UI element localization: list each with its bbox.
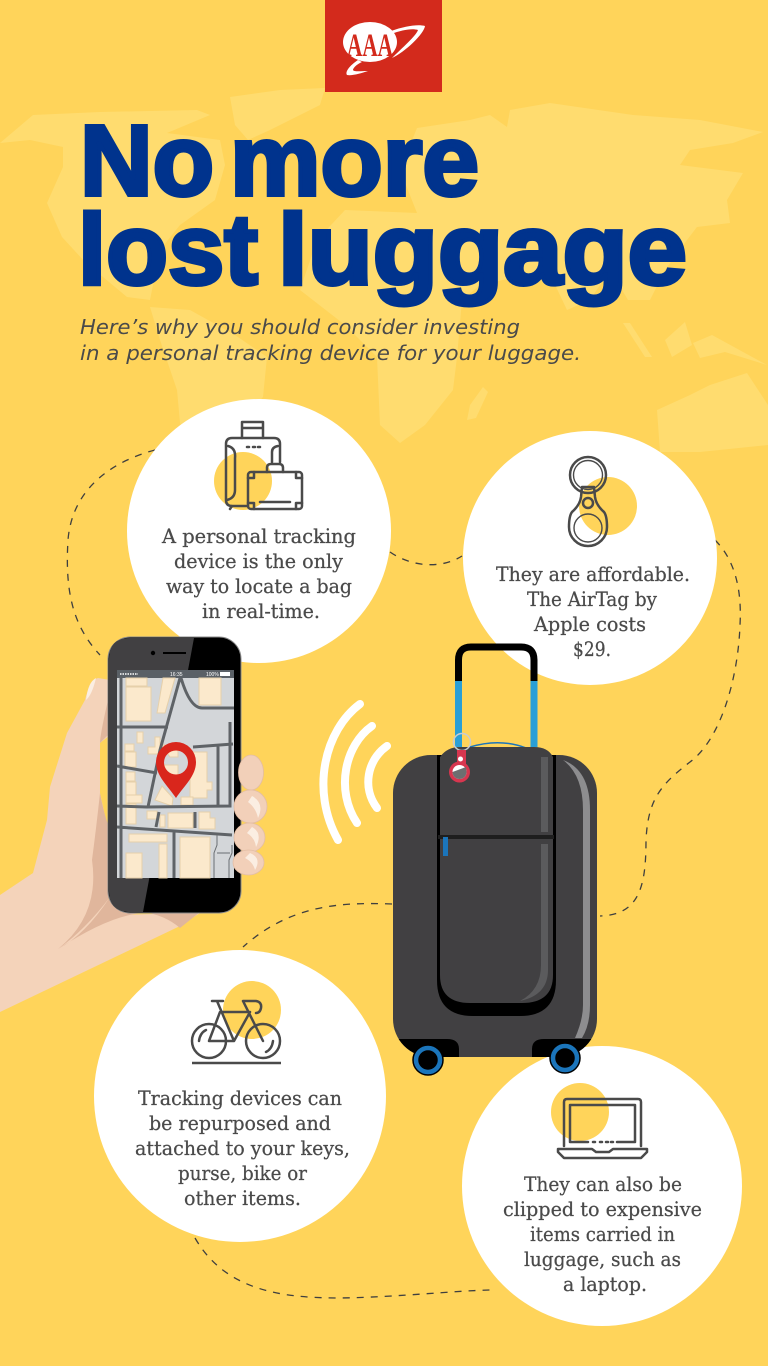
- text: repurposed: [135, 1087, 350, 1210]
- text: repurposed: be repurposed and: [149, 1112, 331, 1135]
- text: expensive items: They can also be: [524, 1173, 682, 1196]
- icon: suitcases: [214, 422, 302, 510]
- panel: real-time location: [127, 399, 391, 663]
- hand holding phone: [0, 678, 200, 1012]
- AAA logo block: AAA: [347, 28, 393, 64]
- title: more: [230, 105, 479, 217]
- dashed route lines: [67, 450, 740, 1298]
- text: repurposed: other items.: [184, 1187, 301, 1210]
- text: repurposed: attached to your keys,: [135, 1137, 350, 1160]
- text: real-time location: in real-time.: [202, 600, 320, 623]
- text: real-time location: [161, 525, 356, 623]
- icon: bicycle: [192, 981, 281, 1063]
- subtitle: [80, 315, 581, 365]
- text: expensive items: luggage, such as: [524, 1248, 681, 1271]
- luggage handle: [458, 647, 534, 747]
- text: real-time location: device is the only: [174, 550, 343, 573]
- title: No: [80, 105, 214, 217]
- map buildings: [125, 678, 221, 878]
- signal waves: [323, 704, 387, 840]
- AAA logo block: [325, 0, 442, 92]
- text: affordable: Apple costs: [533, 613, 646, 636]
- text: affordable: The AirTag by: [527, 588, 657, 611]
- icon: AirTag holder: [569, 457, 637, 546]
- wheel housings: [398, 1039, 592, 1057]
- panel: repurposed: [94, 950, 386, 1242]
- subtitle: in a personal tracking device for your luggage.: [80, 341, 581, 365]
- icon: laptop: [551, 1083, 647, 1158]
- map roads: [117, 678, 234, 878]
- luggage: [390, 647, 600, 1075]
- text: affordable: $29.: [573, 638, 611, 661]
- text: expensive items: clipped to expensive: [503, 1198, 702, 1221]
- text: affordable: [496, 563, 690, 661]
- phone with map: [108, 637, 241, 913]
- world map background: [0, 88, 768, 452]
- status bar text: [120, 672, 230, 678]
- subtitle: Here’s why you should consider investing: [80, 315, 520, 339]
- text: expensive items: items carried in: [530, 1223, 675, 1246]
- text: repurposed: purse, bike or: [178, 1162, 308, 1185]
- status bar text: 100%: [206, 672, 219, 678]
- text: real-time location: way to locate a bag: [166, 575, 352, 598]
- text: expensive items: [503, 1173, 702, 1296]
- text: real-time location: A personal tracking: [161, 525, 356, 548]
- panel: affordable: [463, 431, 717, 685]
- front pocket: [437, 755, 556, 1016]
- title: [78, 105, 687, 306]
- title: lost: [78, 194, 258, 306]
- panel: expensive items: [462, 1046, 742, 1326]
- wheels: [413, 1043, 580, 1075]
- fingers: [233, 755, 267, 875]
- text: expensive items: a laptop.: [563, 1273, 647, 1296]
- airtag holder: [449, 734, 470, 782]
- status bar text: 16:35: [170, 672, 183, 678]
- text: repurposed: Tracking devices can: [138, 1087, 342, 1110]
- icon: location pin: [156, 742, 196, 798]
- right shell highlight: [563, 760, 590, 1038]
- text: affordable: They are affordable.: [496, 563, 690, 586]
- title: luggage: [278, 194, 687, 306]
